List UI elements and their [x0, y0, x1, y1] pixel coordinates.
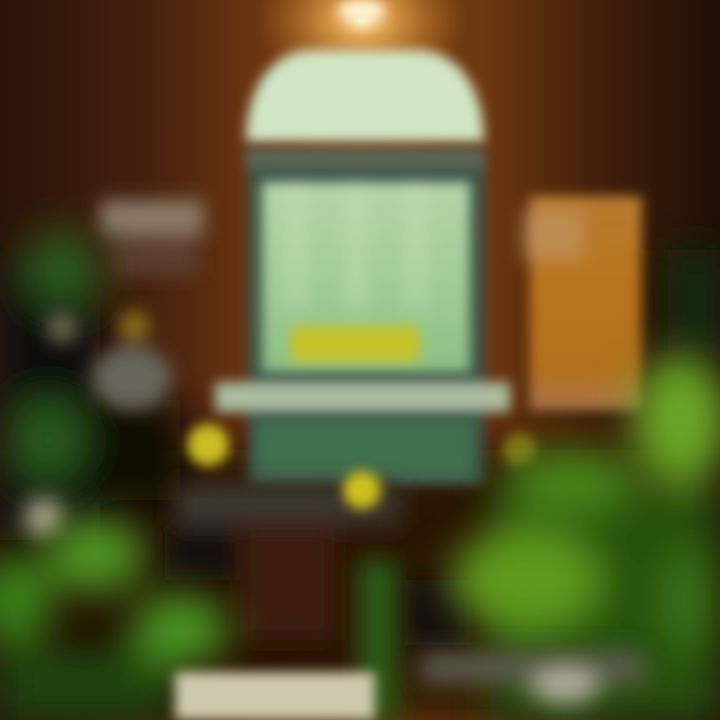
green leaves bottom left — [0, 517, 228, 720]
white pot bottom — [175, 672, 375, 720]
yellow dots — [187, 424, 537, 509]
dark foliage left and right — [0, 230, 720, 540]
bottle — [215, 50, 510, 485]
top light glow — [257, 0, 467, 95]
bottle liquid panel — [262, 182, 470, 372]
bottle body frame — [248, 160, 484, 485]
grey object bottom right — [420, 652, 645, 704]
grey jar left — [46, 311, 172, 410]
orange package right — [522, 196, 642, 410]
yellow bottle label — [290, 326, 420, 362]
bottle cap dome — [246, 50, 484, 142]
liquid streaks — [285, 190, 427, 310]
green leaves right — [450, 355, 720, 720]
dark items foreground — [24, 485, 470, 645]
bottle collar band — [246, 148, 484, 168]
white shelf band — [215, 382, 510, 412]
bottle lower section — [258, 420, 472, 478]
green stem centre — [358, 560, 398, 720]
grey card left — [100, 200, 204, 276]
